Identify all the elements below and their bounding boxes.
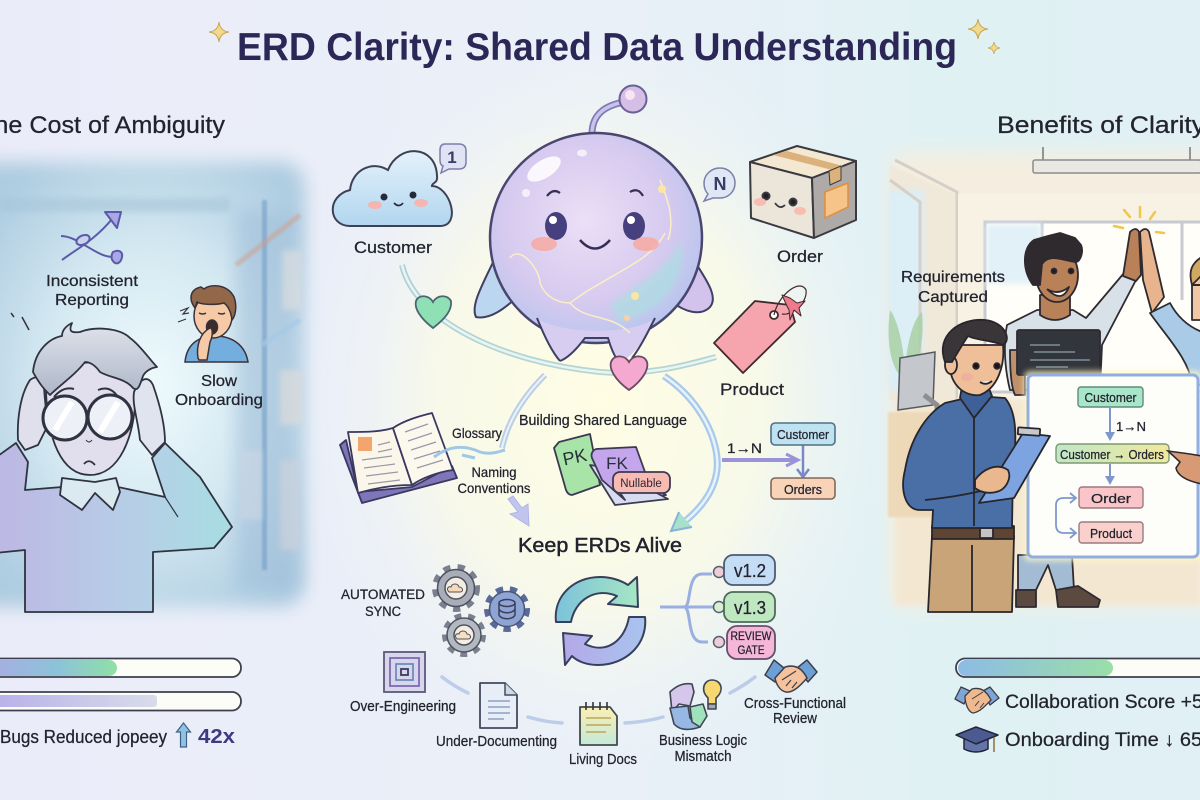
hand: [975, 467, 1009, 493]
panel: central mascot and entities: [333, 86, 856, 448]
heading: keep erds alive: Keep ERDs Alive: [518, 535, 682, 557]
tag: v1.2: v1.2: [734, 561, 766, 581]
orb body: [490, 133, 702, 343]
label: requirements captured: Requirements: [901, 269, 1005, 286]
icon: gears: [436, 568, 526, 654]
tag: review gate: GATE: [738, 645, 765, 657]
icon: key cards: FK: [606, 454, 629, 473]
badge: 1: 1: [447, 148, 457, 167]
arrow: naming to alive: [508, 496, 529, 526]
label: inconsistent reporting: Reporting: [55, 292, 129, 309]
box: order: [1079, 487, 1143, 508]
box: customer: [1078, 387, 1143, 407]
metric: bugs reduced: [0, 723, 235, 748]
ceiling light: [1043, 147, 1190, 160]
label: slow onboarding: Slow: [201, 373, 237, 390]
label: business logic mismatch: Business Logic: [659, 732, 747, 749]
label: order: Order: [777, 247, 823, 266]
floor and desk: [895, 400, 1200, 605]
mini diagram: customer to orders: Customer: [777, 427, 830, 442]
metric: bugs reduced: 42x: [198, 726, 235, 748]
icon: handshake: [765, 660, 817, 692]
light burst: [1114, 207, 1164, 233]
whiteboard erd: [1024, 371, 1200, 561]
badge: 1: [440, 144, 466, 173]
legs: [537, 318, 655, 361]
self-link arrows: [1056, 493, 1076, 538]
figure: colleague right: [1140, 229, 1200, 385]
icon: tangled reporting arrow: [61, 212, 122, 263]
icon: graduation cap: [956, 727, 998, 752]
metric: collaboration score: [955, 687, 1200, 713]
illustration background: warehouse: [0, 162, 305, 607]
icon: puzzle and bulb: [670, 680, 721, 729]
clipboard: [979, 433, 1050, 503]
pointing hand: [1168, 451, 1200, 484]
icon: sync arrows: [556, 577, 645, 665]
glasses: [43, 395, 132, 440]
metric: bugs reduced: Bugs Reduced jopeey: [0, 727, 167, 747]
tag: v1.3: v1.3: [734, 598, 766, 618]
box: product: [1079, 522, 1143, 543]
whiteboard erd: Customer → Orders: [1060, 447, 1164, 462]
badge: N: N: [714, 174, 726, 194]
panel: keep erds alive: [341, 535, 846, 768]
connector with hearts: [402, 265, 716, 448]
mini diagram: customer to orders: Orders: [784, 482, 822, 497]
label: automated sync: SYNC: [365, 604, 401, 619]
hair: [33, 323, 157, 395]
tag: v1.2: [714, 555, 775, 585]
jeans and shoes: [1018, 555, 1074, 590]
label: over-engineering: Over-Engineering: [350, 698, 456, 715]
icon: yawning person: [178, 286, 248, 362]
progress bar: top: [0, 658, 241, 677]
label: business logic mismatch: Mismatch: [674, 748, 732, 765]
icon: handshake small: [955, 687, 999, 713]
version branches: [660, 574, 714, 642]
face: [46, 362, 136, 475]
heading: benefits of clarity: Benefits of Clarity: [997, 112, 1200, 139]
stress marks: [11, 313, 29, 330]
icon: key cards: [554, 434, 670, 505]
illustration background: office: [888, 147, 1200, 608]
icon: customer cloud: [333, 151, 452, 226]
label: customer: Customer: [354, 238, 432, 257]
progress bar: bottom: [0, 692, 241, 710]
head: [950, 345, 1003, 395]
dashed link arc: [442, 677, 755, 723]
label: inconsistent reporting: Inconsistent: [46, 273, 139, 290]
relation 1 to N: [1105, 408, 1146, 441]
label: cross-functional review: Cross-Functional: [744, 695, 846, 712]
mini diagram: customer to orders: [722, 423, 835, 499]
panel: building shared language: [340, 376, 835, 531]
label: naming conventions: Conventions: [458, 480, 530, 496]
mascot: [475, 86, 713, 361]
label: product: Product: [720, 380, 784, 399]
label: living docs: Living Docs: [569, 751, 637, 768]
whiteboard erd: Customer: [1084, 390, 1137, 405]
relation 1 to N: 1→N: [1116, 419, 1146, 434]
icon: green heart: [416, 296, 451, 328]
label: requirements captured: Captured: [918, 289, 988, 306]
icon: open book: [340, 413, 457, 503]
heading: building shared language: Building Shared Language: [519, 412, 687, 429]
badge: N: [704, 168, 735, 201]
label: under-documenting: Under-Documenting: [436, 733, 557, 750]
label: glossary: Glossary: [452, 425, 502, 441]
panel: the cost of ambiguity: [0, 112, 305, 748]
icon: document: [480, 683, 517, 728]
icon: pink heart: [611, 356, 647, 390]
icon: key cards: Nullable: [620, 478, 662, 490]
mini diagram: customer to orders: 1→N: [727, 440, 762, 456]
figure: stressed person: [0, 323, 232, 612]
figure: man with clipboard: [903, 320, 1050, 612]
sweater: [0, 443, 232, 612]
shirt with raised arm: [1005, 273, 1136, 390]
panel: benefits of clarity: [888, 112, 1200, 752]
whiteboard erd: Product: [1090, 526, 1132, 541]
metric: onboarding time: [956, 727, 1200, 752]
label: cross-functional review: Review: [773, 710, 817, 727]
arms: [475, 258, 516, 317]
box: customer to orders: [1056, 444, 1169, 463]
icon: order box: [750, 146, 856, 238]
tag: review gate: REVIEW: [730, 631, 772, 643]
label: automated sync: AUTOMATED: [341, 587, 425, 602]
label: slow onboarding: Onboarding: [175, 392, 263, 409]
tag: v1.3: [714, 592, 775, 622]
whiteboard erd: Order: [1091, 491, 1132, 506]
trousers: [928, 536, 1014, 612]
label: naming conventions: Naming: [472, 464, 516, 480]
icon: product tag: [714, 286, 806, 373]
title: ERD Clarity: Shared Data Understanding: [237, 26, 957, 69]
figure: colleague high-fiving: [1005, 229, 1141, 607]
face: [545, 212, 567, 240]
hands: [18, 377, 48, 450]
shirt: [903, 396, 1015, 528]
progress bar: collaboration: [956, 658, 1200, 677]
tag: review gate: [714, 626, 775, 659]
curved arrow to keep erds alive: [664, 376, 717, 531]
icon: maze: [384, 652, 425, 692]
antenna: [592, 101, 630, 134]
icon: notepad: [580, 702, 617, 745]
icon: key cards: PK: [561, 445, 589, 469]
flow squiggle: [434, 447, 505, 458]
